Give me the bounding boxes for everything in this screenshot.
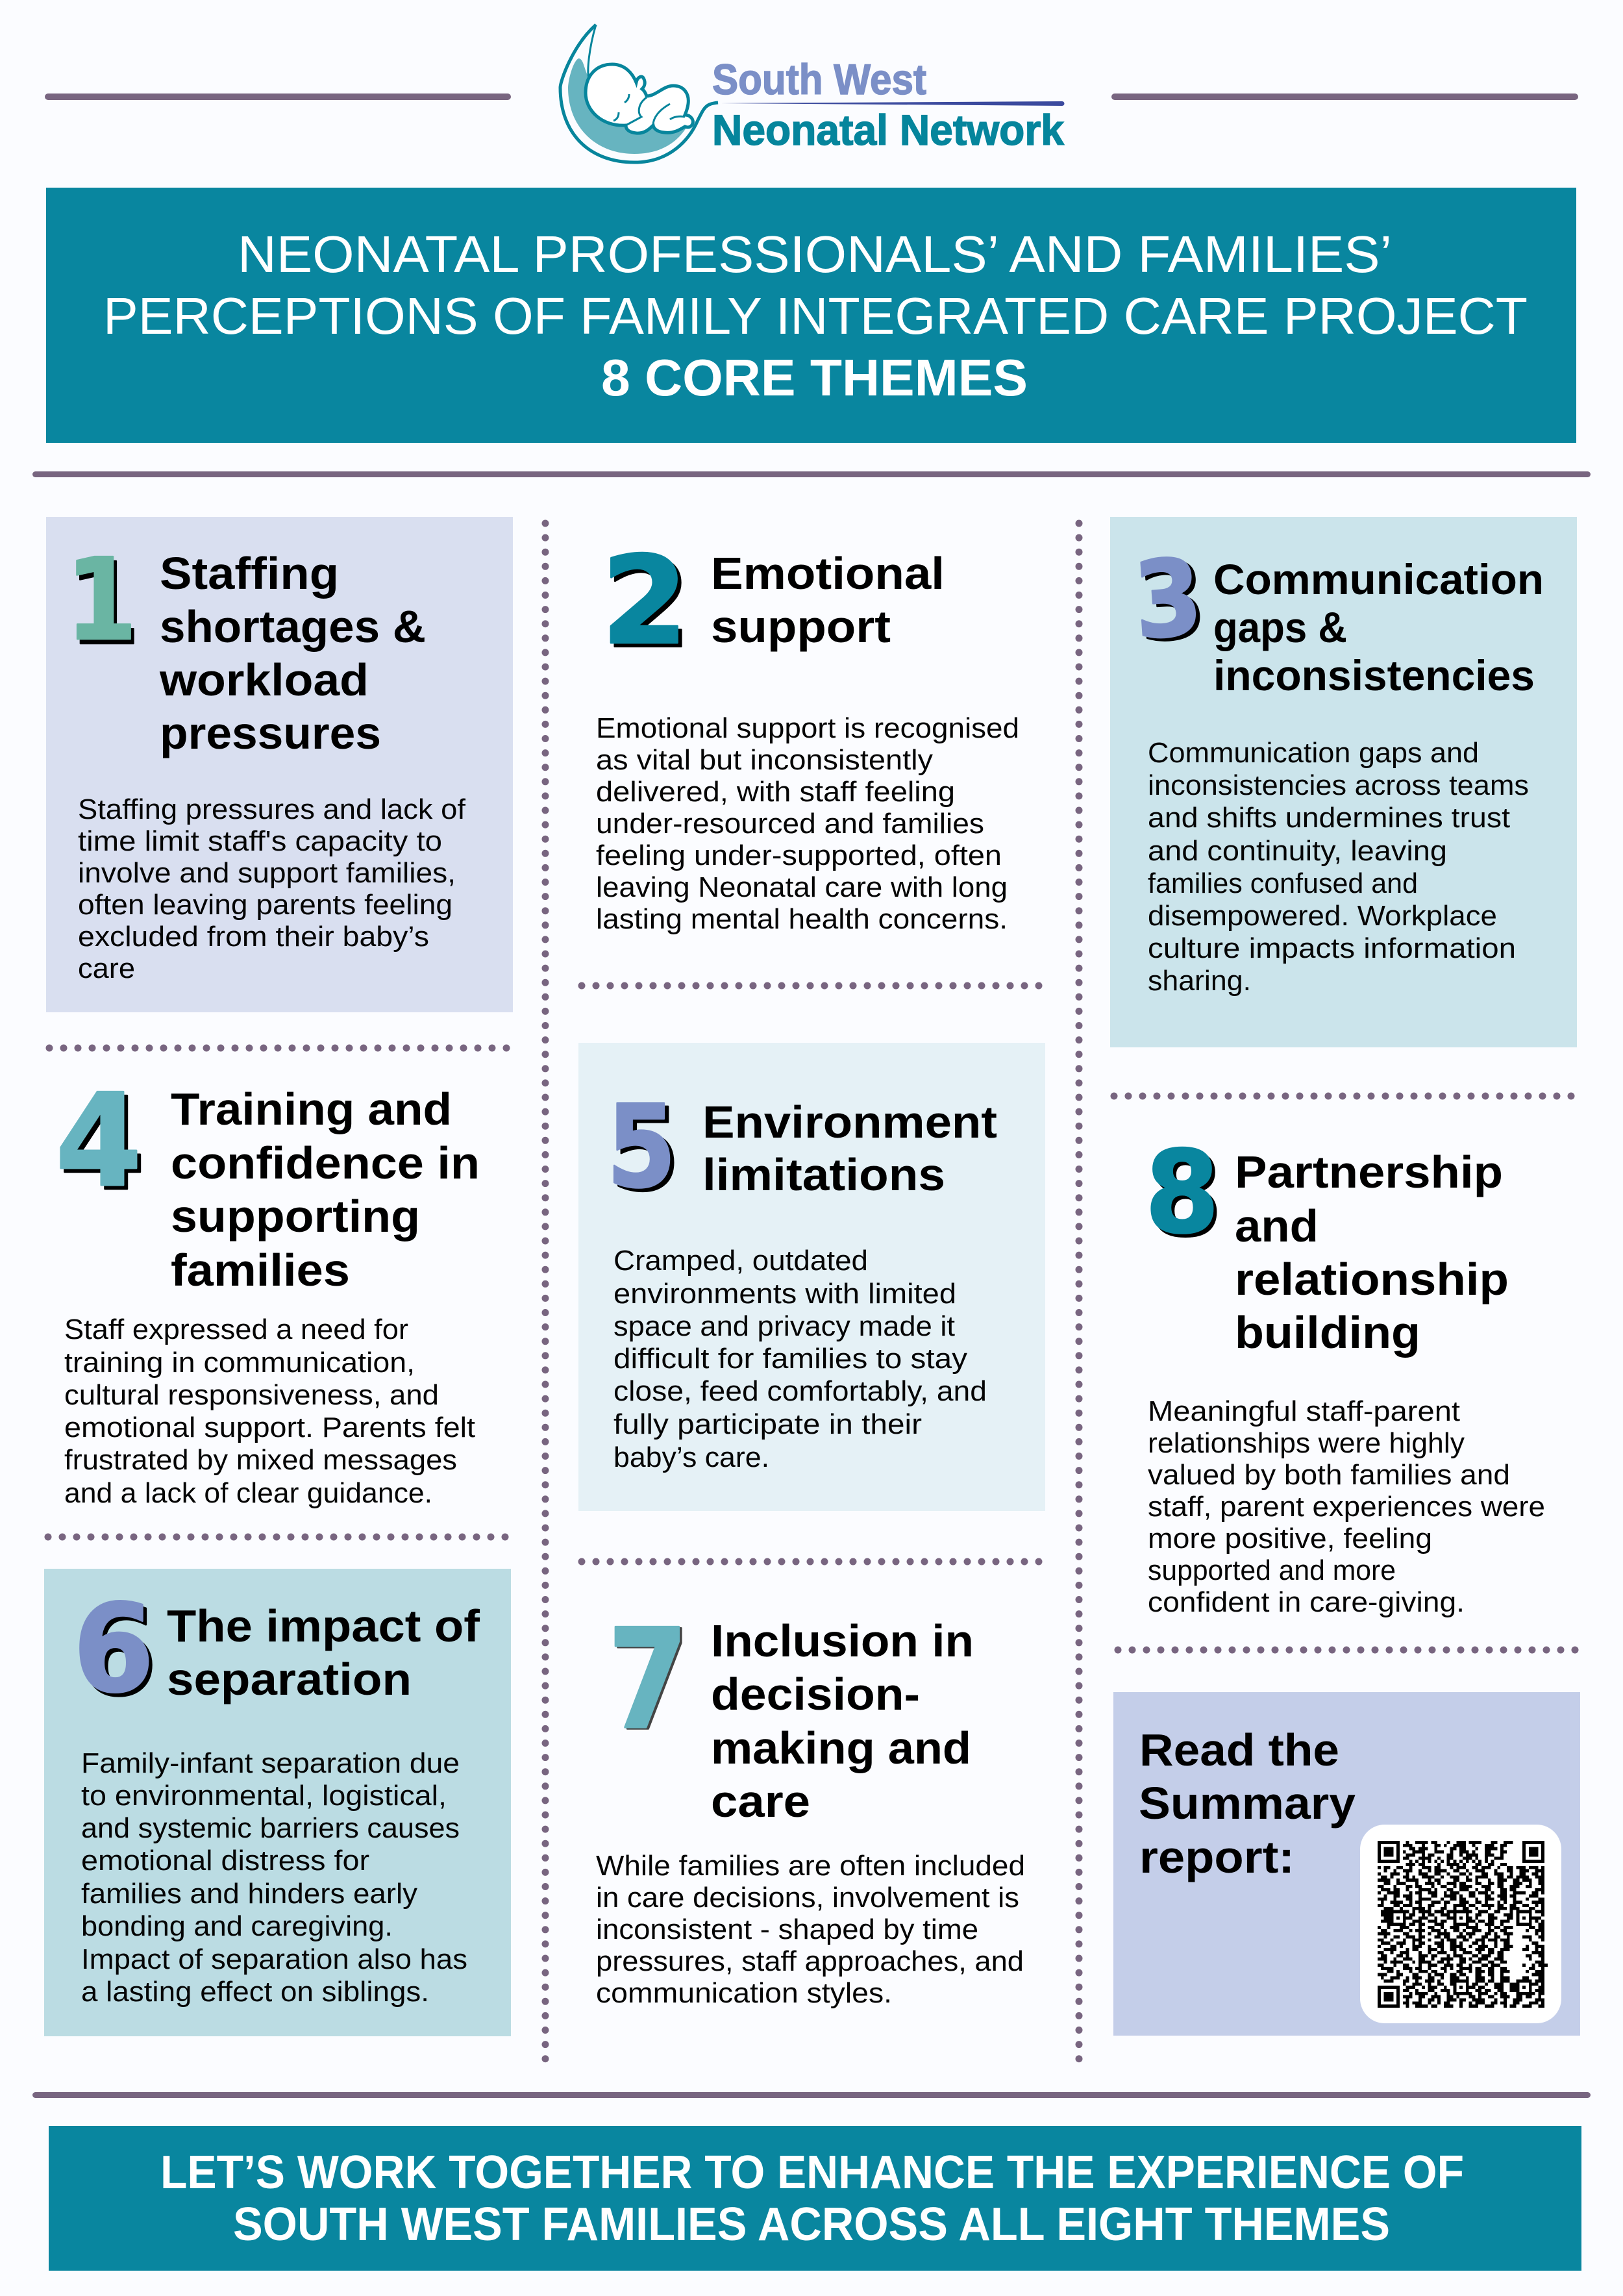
body text: disempowered. Workplace: [1148, 900, 1497, 932]
body text: Impact of separation also has: [81, 1943, 467, 1975]
panel: theme 2 emotional support: [596, 530, 1019, 935]
body text: pressures, staff approaches, and: [596, 1945, 1024, 1977]
heading: Partnership: [1235, 1147, 1503, 1197]
panel: theme 3 communication: [1110, 517, 1577, 1047]
heading: The impact of: [167, 1601, 480, 1651]
body text: [613, 1245, 987, 1473]
heading: families: [171, 1245, 350, 1295]
number 3: 3: [1130, 536, 1206, 663]
heading: inconsistencies: [1213, 651, 1535, 699]
heading: Emotional: [711, 548, 945, 599]
body text: Staff expressed a need for: [64, 1314, 408, 1345]
body text: [1148, 737, 1529, 997]
body text: communication styles.: [596, 1977, 892, 2009]
body text: families and hinders early: [81, 1878, 417, 1910]
body text: environments with limited: [613, 1278, 956, 1310]
body text: Meaningful staff-parent: [1148, 1395, 1460, 1427]
panel: theme 8 partnership: [1145, 1127, 1545, 1618]
body text: supported and more: [1148, 1554, 1396, 1586]
heading: separation: [167, 1654, 412, 1704]
number 7: 7: [608, 1600, 688, 1760]
number 8: 8: [1148, 1130, 1222, 1262]
heading: Inclusion in: [711, 1616, 974, 1666]
body text: care: [78, 953, 135, 984]
number 6: 6: [73, 1579, 155, 1720]
logo icon: baby on crescent moon: [560, 25, 718, 162]
body text: lasting mental health concerns.: [596, 903, 1008, 935]
body text: time limit staff's capacity to: [78, 825, 442, 857]
body text: often leaving parents feeling: [78, 889, 452, 921]
heading: making and: [711, 1723, 971, 1773]
number 1: 1: [65, 535, 138, 666]
body text: more positive, feeling: [1148, 1523, 1432, 1554]
body text: under-resourced and families: [596, 808, 984, 840]
body text: and systemic barriers causes: [81, 1812, 460, 1844]
panel: read the summary report: [1113, 1692, 1580, 2036]
heading: [711, 1616, 974, 1827]
body text: emotional support. Parents felt: [64, 1412, 475, 1443]
body text: While families are often included: [596, 1850, 1025, 1882]
title line 2: PERCEPTIONS OF FAMILY INTEGRATED CARE PROJECT: [103, 287, 1528, 345]
title line 1: NEONATAL PROFESSIONALS’ AND FAMILIES’: [238, 225, 1392, 283]
body text: a lasting effect on siblings.: [81, 1976, 429, 2008]
heading: [1139, 1725, 1356, 1882]
number 5: 5: [606, 1081, 676, 1214]
body text: valued by both families and: [1148, 1459, 1510, 1491]
number 1: 1: [68, 540, 140, 671]
body text: Cramped, outdated: [613, 1245, 868, 1277]
body text: fully participate in their: [613, 1408, 922, 1440]
panel: theme 1 staffing: [46, 517, 513, 1012]
heading: shortages &: [160, 601, 426, 652]
title banner: [46, 188, 1576, 443]
body text: [81, 1747, 467, 2008]
body text: frustrated by mixed messages: [64, 1444, 457, 1476]
heading: and: [1235, 1201, 1319, 1251]
number 6: 6: [77, 1582, 158, 1723]
logo: South West Neonatal Network: [560, 25, 1065, 162]
panel: theme 6 separation: [44, 1569, 511, 2036]
call to action line 2: SOUTH WEST FAMILIES ACROSS ALL EIGHT THEMES: [233, 2199, 1390, 2251]
body text: space and privacy made it: [613, 1310, 955, 1342]
number 7: 7: [610, 1601, 690, 1762]
heading: [1213, 555, 1544, 699]
body text: [64, 1314, 475, 1509]
logo text: Neonatal Network: Neonatal Network: [712, 106, 1064, 154]
body text: cultural responsiveness, and: [64, 1379, 439, 1411]
heading: limitations: [702, 1149, 945, 1200]
heading: confidence in: [171, 1138, 480, 1188]
body text: in care decisions, involvement is: [596, 1882, 1019, 1914]
heading: [171, 1084, 480, 1295]
body text: [596, 1850, 1025, 2009]
body text: and continuity, leaving: [1148, 835, 1447, 867]
body text: to environmental, logistical,: [81, 1780, 447, 1812]
body text: close, feed comfortably, and: [613, 1375, 987, 1407]
heading: [159, 548, 426, 758]
QR code: [1360, 1825, 1561, 2023]
number 2: 2: [601, 530, 688, 671]
call to action line 1: LET’S WORK TOGETHER TO ENHANCE THE EXPERIENCE OF: [160, 2147, 1464, 2199]
heading: Environment: [702, 1097, 997, 1147]
body text: staff, parent experiences were: [1148, 1491, 1545, 1523]
heading: building: [1235, 1307, 1420, 1358]
body text: as vital but inconsistently: [596, 744, 933, 776]
logo text: South West: South West: [712, 55, 926, 103]
heading: report:: [1139, 1832, 1295, 1882]
body text: sharing.: [1148, 965, 1251, 997]
number 5: 5: [610, 1084, 680, 1217]
body text: Emotional support is recognised: [596, 712, 1019, 744]
number 2: 2: [605, 534, 692, 675]
body text: bonding and caregiving.: [81, 1910, 393, 1942]
number 4: 4: [59, 1070, 146, 1219]
heading: Communication: [1213, 555, 1544, 603]
body text: inconsistent - shaped by time: [596, 1914, 978, 1945]
heading: Summary: [1139, 1778, 1356, 1828]
title line 3: 8 CORE THEMES: [601, 349, 1028, 406]
body text: inconsistencies across teams: [1148, 769, 1529, 801]
heading: Staffing: [160, 548, 339, 599]
heading: gaps &: [1213, 603, 1347, 651]
body text: confident in care-giving.: [1148, 1586, 1465, 1618]
heading: [1235, 1147, 1509, 1358]
body text: relationships were highly: [1148, 1427, 1465, 1459]
heading: [702, 1097, 997, 1200]
body text: Staffing pressures and lack of: [78, 793, 466, 825]
panel: theme 5 environment: [578, 1043, 1045, 1511]
number 4: 4: [55, 1066, 142, 1216]
heading: Read the: [1139, 1725, 1339, 1775]
body text: [1148, 1395, 1545, 1618]
body text: [78, 793, 466, 984]
call to action banner: [49, 2126, 1581, 2271]
heading: Training and: [171, 1084, 452, 1134]
number 3: 3: [1134, 538, 1210, 666]
body text: Communication gaps and: [1148, 737, 1479, 769]
body text: delivered, with staff feeling: [596, 776, 955, 808]
heading: decision-: [711, 1669, 920, 1719]
body text: difficult for families to stay: [613, 1343, 967, 1375]
body text: training in communication,: [64, 1347, 415, 1379]
panel: theme 4 training: [55, 1066, 480, 1509]
body text: leaving Neonatal care with long: [596, 871, 1008, 903]
body text: families confused and: [1148, 867, 1418, 899]
heading: [167, 1601, 480, 1704]
body text: feeling under-supported, often: [596, 840, 1002, 871]
panel: theme 7 inclusion: [596, 1600, 1025, 2009]
heading: relationship: [1235, 1254, 1509, 1304]
heading: pressures: [160, 708, 381, 758]
number 8: 8: [1145, 1127, 1219, 1259]
heading: supporting: [171, 1191, 420, 1242]
body text: baby’s care.: [613, 1441, 769, 1473]
body text: emotional distress for: [81, 1845, 369, 1877]
heading: workload: [159, 655, 369, 705]
body text: [596, 712, 1019, 935]
heading: care: [711, 1776, 810, 1827]
body text: culture impacts information: [1148, 932, 1516, 964]
body text: and a lack of clear guidance.: [64, 1477, 432, 1509]
body text: involve and support families,: [78, 857, 456, 889]
heading: [711, 548, 945, 652]
body text: and shifts undermines trust: [1148, 802, 1510, 834]
body text: Family-infant separation due: [81, 1747, 460, 1779]
logo rule: [721, 101, 1065, 106]
body text: excluded from their baby’s: [78, 921, 429, 953]
heading: support: [711, 601, 891, 652]
